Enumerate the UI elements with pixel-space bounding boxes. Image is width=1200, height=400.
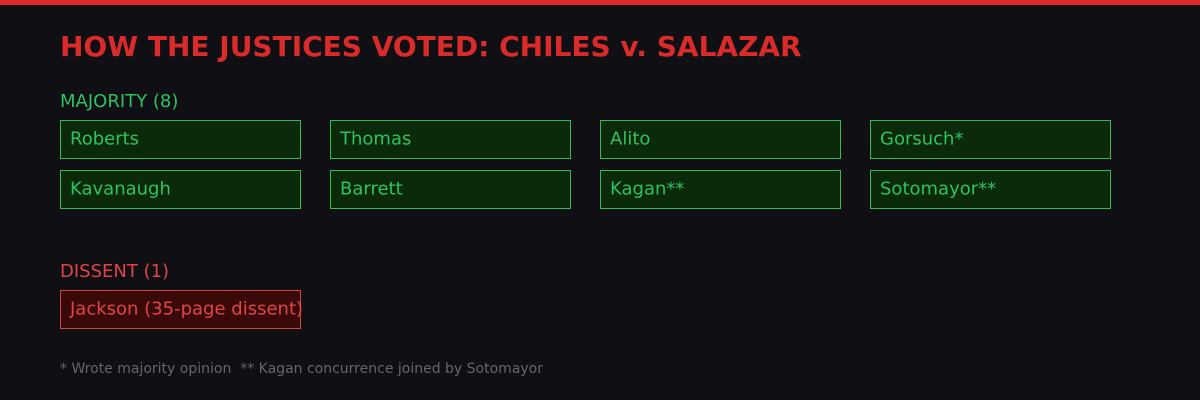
justice: Thomas: Thomas — [339, 128, 411, 150]
justice: Kavanaugh: Kavanaugh — [70, 178, 171, 200]
justice: Alito — [600, 120, 840, 158]
justice: Gorsuch — [870, 120, 1110, 158]
justice: Barrett: Barrett — [340, 178, 403, 200]
panel: majority justices — [60, 120, 1110, 208]
justice: Roberts: Roberts — [70, 128, 139, 150]
title: HOW THE JUSTICES VOTED: CHILES v. SALAZAR — [60, 30, 802, 63]
justice: Roberts — [60, 120, 300, 158]
top accent bar — [0, 0, 1200, 5]
justice: Kagan: Kagan** — [610, 178, 684, 200]
justice: Kavanaugh — [60, 170, 300, 208]
justice: Barrett — [330, 170, 570, 208]
justice: Gorsuch: Gorsuch* — [880, 128, 963, 150]
heading: majority: MAJORITY (8) — [60, 91, 178, 112]
justice: Jackson dissent: Jackson (35-page dissent) — [69, 298, 303, 320]
justice: Sotomayor — [870, 170, 1110, 208]
justice: Thomas — [330, 120, 570, 158]
footnote: * Wrote majority opinion ** Kagan concurrence joined by Sotomayor — [60, 361, 543, 377]
justice: Jackson dissent — [60, 290, 303, 328]
heading: dissent: DISSENT (1) — [60, 261, 169, 282]
justice: Kagan — [600, 170, 840, 208]
justice: Alito: Alito — [610, 128, 650, 150]
justice: Sotomayor: Sotomayor** — [880, 178, 996, 200]
